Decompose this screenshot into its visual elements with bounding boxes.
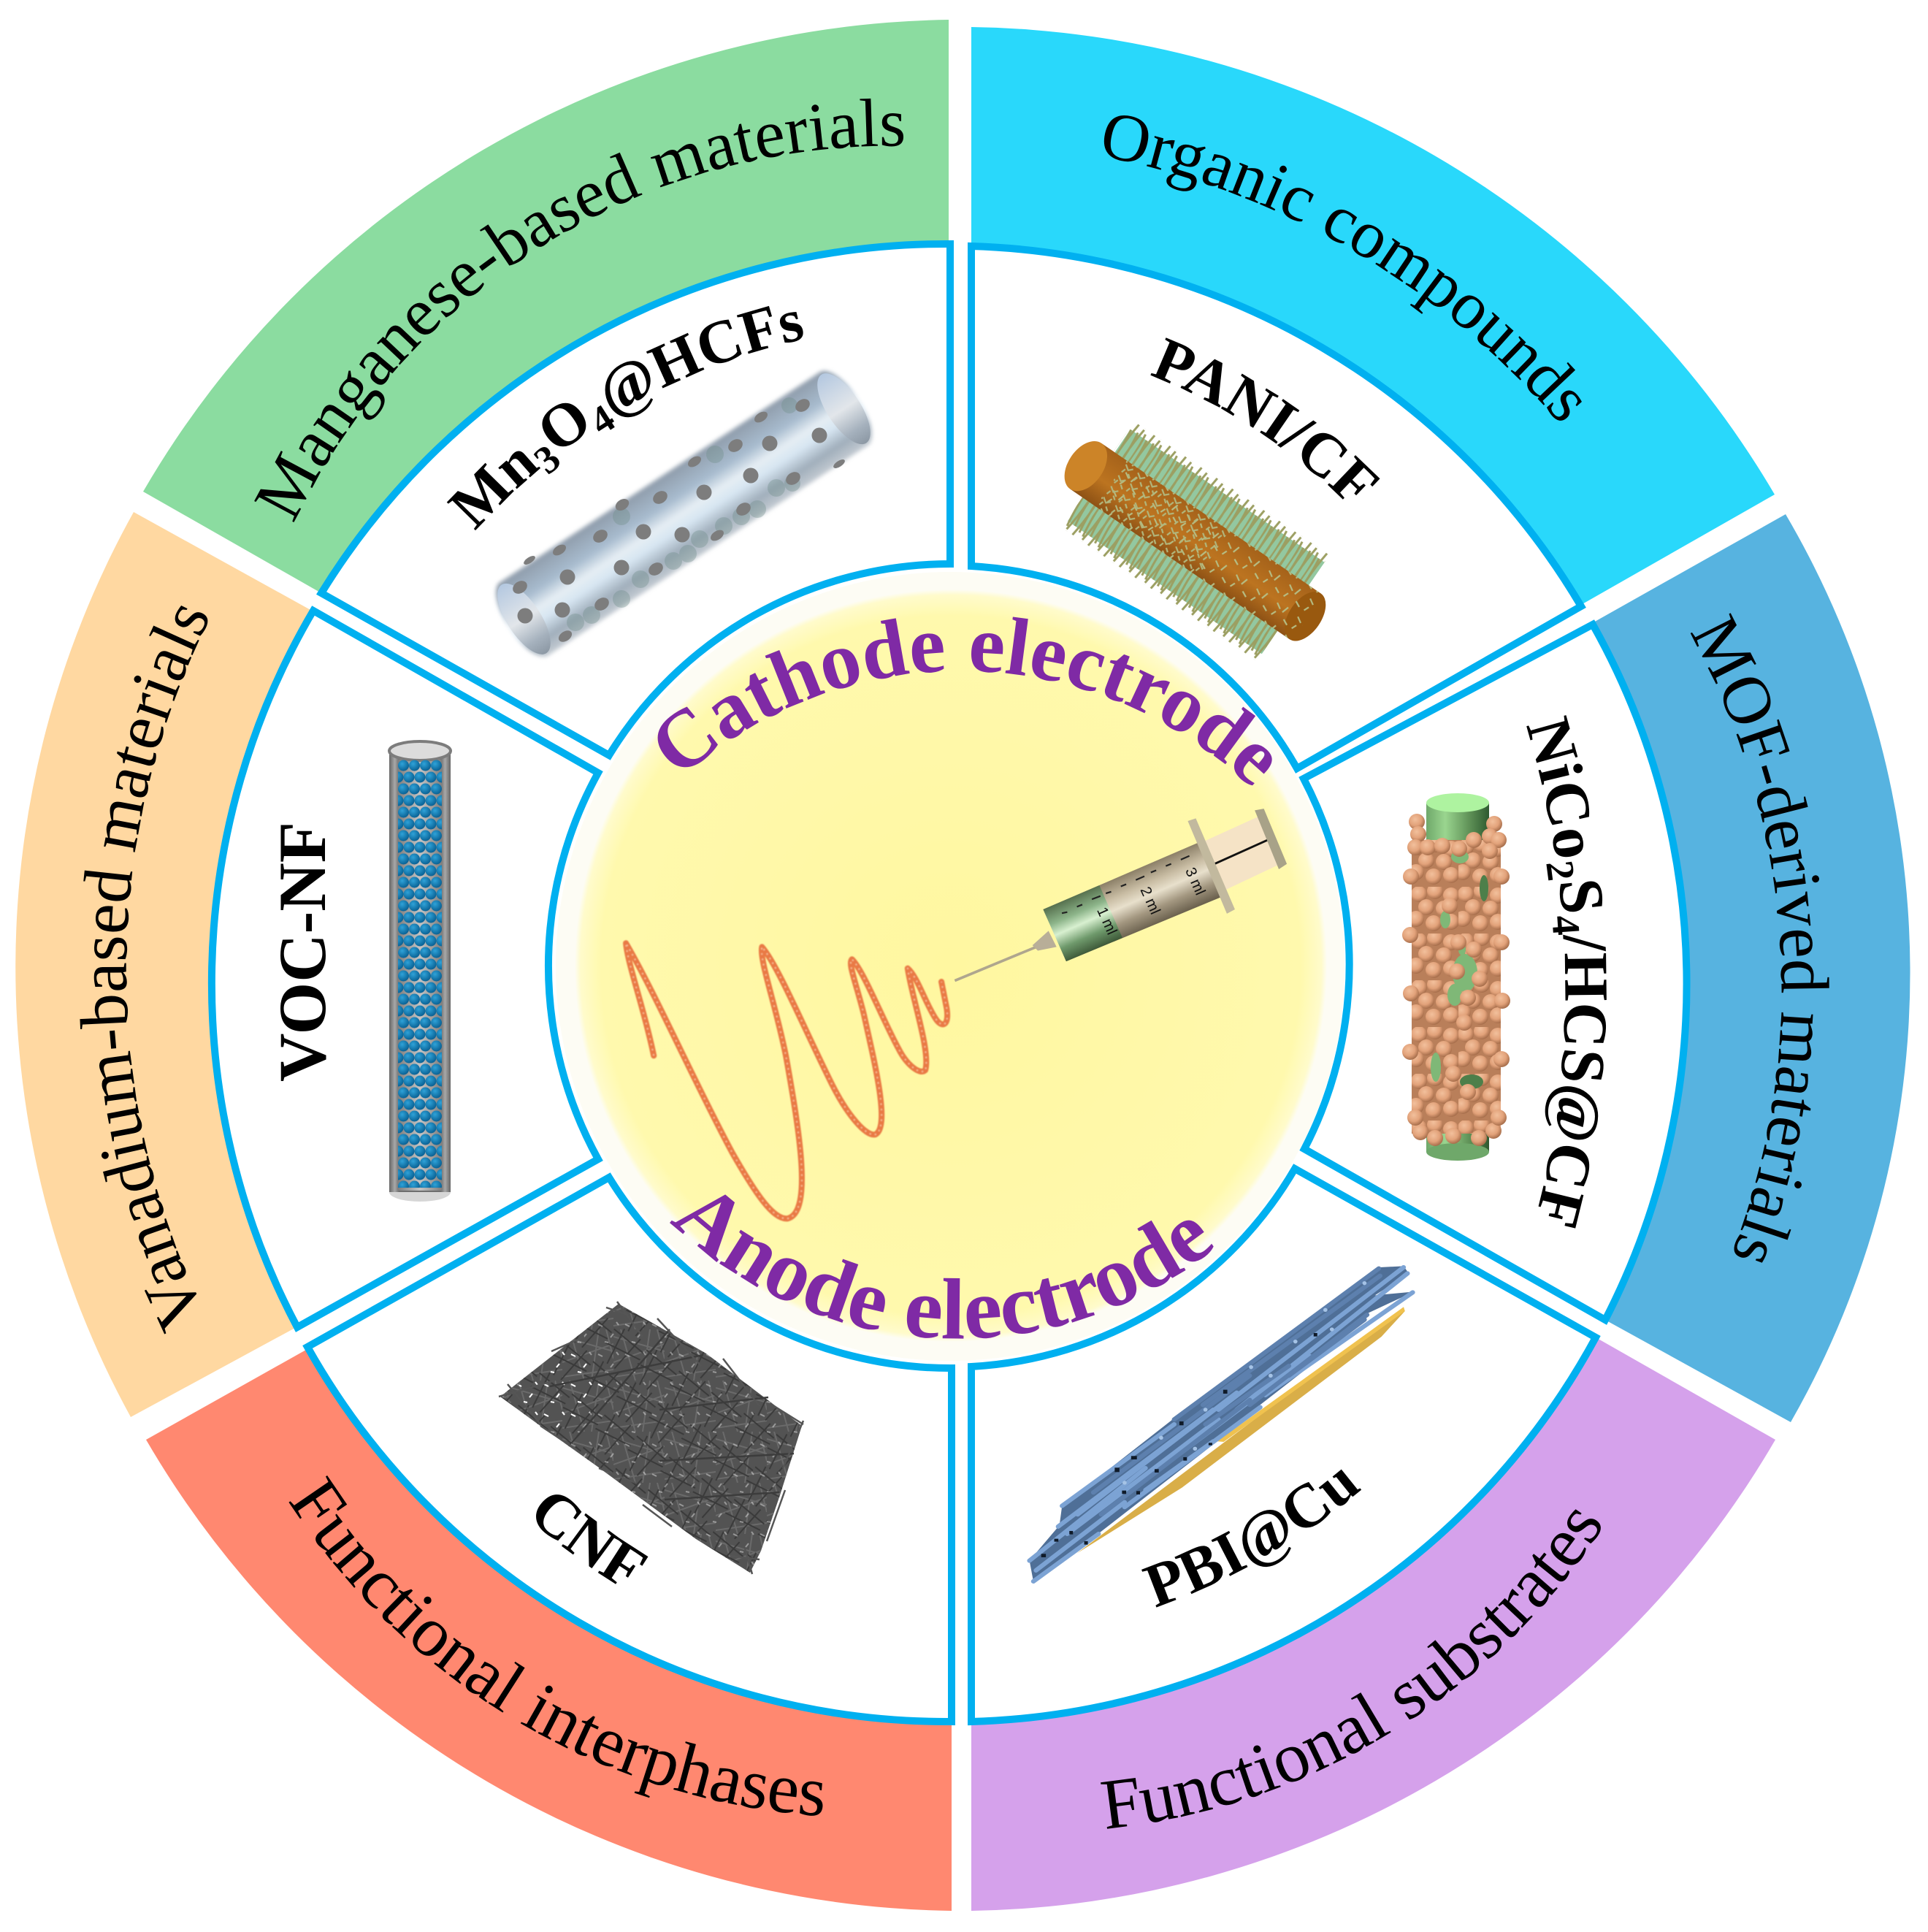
icon: carbon nanofibre mat — [499, 1302, 803, 1574]
material label: CNF — [536, 1494, 649, 1584]
material label: PANI/CF — [1150, 337, 1380, 500]
sector: organic compounds — [968, 27, 1775, 774]
band: orange — [15, 512, 312, 1417]
material label: /HCS@CF — [1538, 935, 1607, 1229]
heading: cathode electrode: Cathode electrode — [657, 616, 1272, 786]
icon: VOC nanofibre tube — [389, 741, 451, 1202]
icon: perforated hollow fibre — [486, 362, 882, 665]
sector: manganese-based materials — [143, 20, 954, 760]
band: cyan — [971, 27, 1775, 605]
syringe scale labels — [1093, 865, 1209, 937]
material label: NiCo — [1526, 715, 1589, 858]
band label: Organic compounds — [1104, 115, 1582, 421]
panel outline — [971, 246, 1581, 768]
icon: PANI coated carbon fibre — [1035, 403, 1355, 679]
material label: 4 — [597, 405, 615, 432]
panel outline — [212, 611, 598, 1327]
icon: syringe — [955, 809, 1287, 981]
band: blue — [1594, 514, 1910, 1422]
band label: Functional substrates — [1101, 1509, 1601, 1829]
material label: VOC-NF — [280, 825, 326, 1081]
syringe scale labels: 1 ml — [1093, 904, 1120, 937]
panel outline — [307, 1177, 952, 1722]
sector: functional substrates — [968, 1164, 1775, 1911]
sector: MOF-derived materials — [1298, 514, 1910, 1422]
material label: 2 — [1546, 862, 1573, 881]
material label: 4 — [1553, 916, 1579, 935]
centre disc — [575, 590, 1326, 1341]
band label: Vanadium-based materials — [80, 606, 207, 1334]
band label: MOF-derived materials — [1690, 613, 1829, 1263]
heading: anode electrode: Anode electrode — [670, 1194, 1214, 1339]
icon: PBI fibres on copper sheet — [1030, 1266, 1414, 1581]
material label: PBI@Cu — [1141, 1470, 1361, 1608]
centre disc halo — [556, 572, 1344, 1361]
panel outline — [321, 244, 950, 755]
band: purple — [971, 1337, 1775, 1911]
material label: 3 — [533, 447, 559, 475]
band label: Functional interphases — [289, 1475, 822, 1816]
sector: functional interphases — [146, 1172, 955, 1911]
electrospun jet wave — [626, 943, 947, 1218]
band: green — [143, 20, 949, 593]
syringe scale labels: 3 ml — [1182, 865, 1209, 898]
panel outline — [1304, 625, 1687, 1320]
band: coral — [146, 1350, 952, 1911]
material label: O — [542, 403, 586, 447]
material label: @HCFs — [605, 305, 803, 418]
sector: vanadium-based materials — [15, 512, 603, 1417]
icon: NiCo2S4 spheres on fibre — [1402, 793, 1510, 1161]
syringe scale labels: 2 ml — [1137, 885, 1163, 917]
band label: Manganese-based materials — [254, 98, 904, 522]
yellow disc — [575, 589, 1327, 1342]
material label: Mn — [447, 451, 540, 530]
panel outline — [971, 1169, 1596, 1722]
material label: S — [1560, 881, 1602, 912]
